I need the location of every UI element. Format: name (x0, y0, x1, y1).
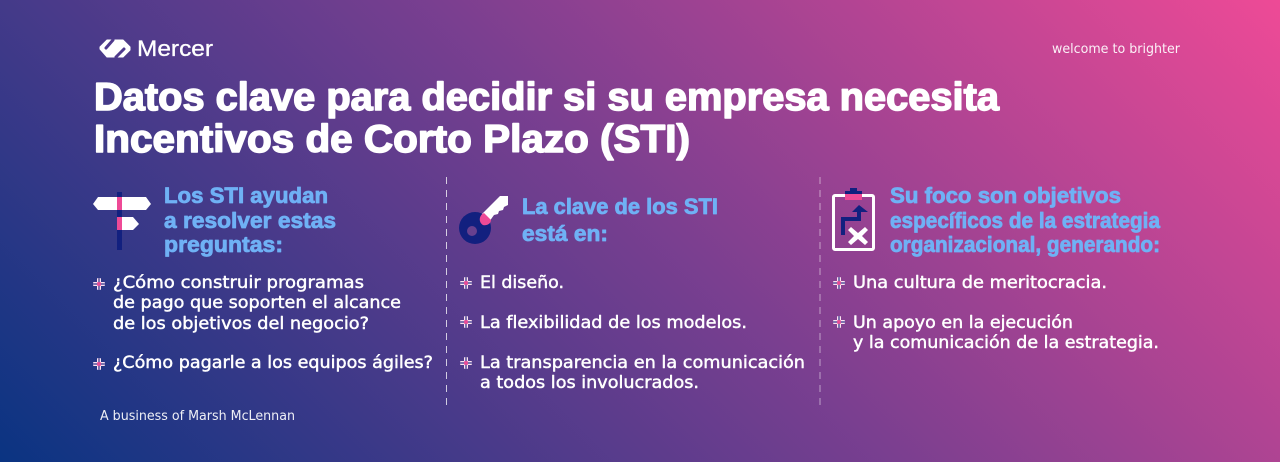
list: preguntas: ¿Cómo construir programas (113, 273, 364, 292)
icon: signpost (93, 192, 151, 250)
icon: key (459, 196, 508, 244)
list: la clave: La flexibilidad de los modelos. (480, 313, 747, 332)
list: preguntas: de los objetivos del negocio? (113, 314, 369, 333)
heading: la clave (522, 194, 718, 246)
logo: Mercer: Mercer (137, 36, 213, 61)
list: foco: Un apoyo en la ejecución (853, 313, 1073, 332)
list: la clave: La transparencia en la comunicación (480, 353, 805, 372)
heading: foco (890, 183, 1160, 257)
list: foco: Una cultura de meritocracia. (853, 273, 1107, 292)
icon: clipboard (834, 188, 874, 250)
heading: la clave: está en: (522, 221, 608, 246)
logo: Mercer (100, 36, 213, 61)
list: la clave (460, 273, 805, 392)
footer note: A business of Marsh McLennan (100, 409, 295, 424)
list: foco: y la comunicación de la estrategia. (853, 333, 1159, 352)
title (94, 76, 999, 161)
heading: preguntas: preguntas: (164, 232, 283, 257)
heading: foco: organizacional, generando: (890, 232, 1160, 257)
list: foco (833, 273, 1159, 352)
tagline: welcome to brighter (1052, 42, 1181, 57)
list: la clave: a todos los involucrados. (480, 373, 699, 392)
panel: foco (833, 183, 1160, 352)
heading: foco: específicos de la estrategia (890, 208, 1160, 233)
list: la clave: El diseño. (480, 273, 564, 292)
panel: preguntas (93, 183, 433, 372)
title: Incentivos de Corto Plazo (STI) (94, 118, 690, 161)
list: preguntas: de pago que soporten el alcance (113, 293, 401, 312)
heading: preguntas (164, 183, 336, 257)
heading: preguntas: Los STI ayudan (164, 183, 328, 208)
title: Datos clave para decidir si su empresa necesita (94, 76, 999, 119)
list: preguntas: ¿Cómo pagarle a los equipos ágiles? (113, 353, 433, 372)
heading: la clave: La clave de los STI (522, 194, 718, 219)
heading: foco: Su foco son objetivos (890, 183, 1121, 208)
heading: preguntas: a resolver estas (164, 208, 336, 233)
list: preguntas (93, 273, 433, 372)
panel: la clave (459, 194, 805, 392)
